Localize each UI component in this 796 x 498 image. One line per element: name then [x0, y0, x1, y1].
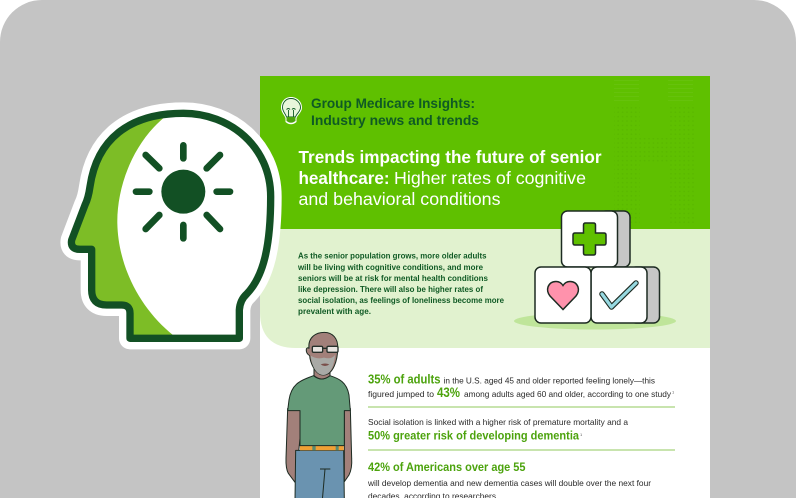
stat: 50 percent dementia risk: 50% greater risk of developing dementia: [368, 429, 579, 443]
illustration: man: [286, 332, 352, 498]
stat: 42 percent Americans: 42% of Americans over age 55: [368, 460, 526, 474]
head: [306, 332, 338, 375]
text block: intro: will be living with cognitive conditions, and more: [297, 262, 483, 272]
text block: intro: As the senior population grows, more older adults: [298, 251, 487, 261]
stat: 35 percent lonely: [368, 372, 675, 400]
heading: section label: Group Medicare Insights:: [311, 96, 475, 111]
left arm: [286, 408, 300, 482]
title: [298, 147, 602, 209]
icon: head with sun: [60, 102, 282, 350]
stat: 35 percent lonely: figured jumped to: [368, 389, 434, 399]
stat: 35 percent lonely: 1: [672, 390, 675, 394]
stat: 42 percent Americans: [367, 460, 651, 498]
icon: sun: [136, 145, 230, 238]
block: heart: [535, 267, 591, 323]
right arm: [344, 408, 352, 482]
stat: 35 percent lonely: 43%: [437, 385, 460, 400]
belt: [300, 446, 344, 450]
icon: stacked blocks: [514, 211, 676, 330]
divider: [368, 450, 675, 451]
text block: intro: seniors will be at risk for mental health conditions: [298, 273, 488, 283]
stat: 35 percent lonely: among adults aged 60 and older, according to one study: [464, 389, 672, 399]
neck: [314, 365, 330, 379]
stat: 42 percent Americans: will develop dementia and new dementia cases will double over the next four: [367, 478, 651, 488]
heading: section label: [311, 96, 479, 128]
stat: 35 percent lonely: 35% of adults: [368, 372, 440, 387]
block: check: [591, 267, 660, 323]
text block: intro: like depression. There will also be higher rates of: [298, 284, 483, 294]
stat: 35 percent lonely: in the U.S. aged 45 and older reported feeling lonely—this: [444, 376, 656, 386]
panel: green header: [260, 76, 710, 229]
heading: section label: Industry news and trends: [311, 113, 479, 128]
trousers: [295, 450, 344, 498]
title: healthcare:: [298, 168, 390, 188]
stat: 50 percent dementia risk: 1: [580, 432, 583, 437]
title: Higher rates of cognitive: [394, 168, 586, 188]
title: and behavioral conditions: [298, 189, 501, 209]
stat: 50 percent dementia risk: Social isolation is linked with a higher risk of premature mortality and a: [368, 417, 628, 427]
glasses: [312, 346, 338, 352]
divider: [368, 406, 675, 408]
panel: light green intro: [260, 229, 710, 348]
dot pattern: faint H: [614, 78, 695, 226]
stat: 50 percent dementia risk: [368, 417, 628, 443]
shirt: [288, 376, 350, 446]
panel: document: [260, 76, 710, 498]
beard: [311, 355, 335, 375]
text block: intro: social isolation, as feelings of loneliness become more: [298, 295, 504, 305]
icon: light bulb: [281, 97, 302, 124]
text block: intro: [297, 251, 504, 316]
text block: intro: prevalent with age.: [298, 306, 371, 316]
block shadow: [514, 312, 676, 330]
block: plus: [562, 211, 630, 267]
title: Trends impacting the future of senior: [298, 147, 602, 167]
